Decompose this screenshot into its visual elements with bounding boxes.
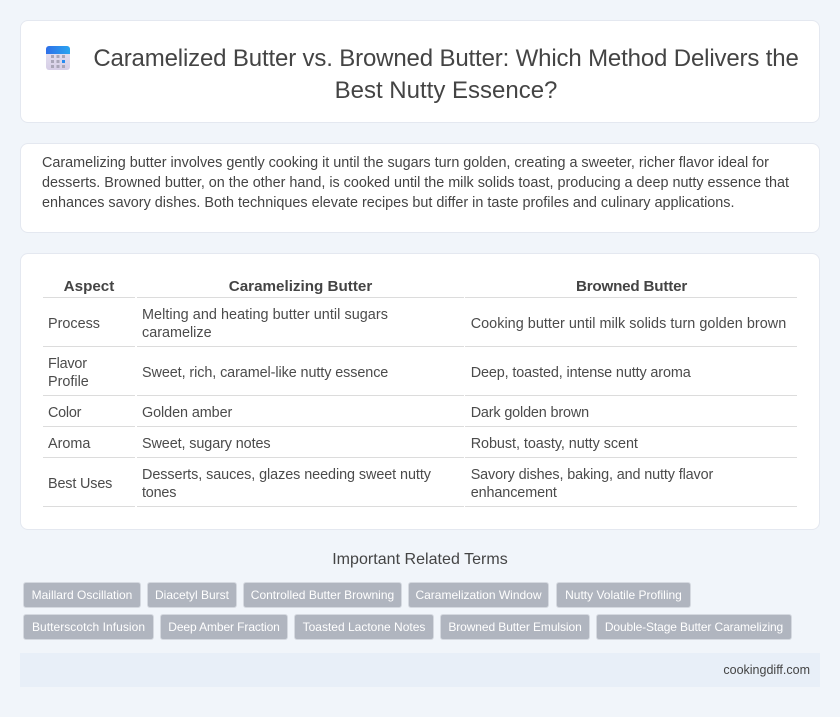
- tag: [556, 582, 691, 608]
- row: color: Golden amber: [142, 405, 232, 421]
- tag: [160, 614, 288, 640]
- tag: Deep Amber Fraction: [168, 620, 280, 634]
- tag: [243, 582, 402, 608]
- tag: [440, 614, 590, 640]
- tag list: [23, 582, 792, 640]
- title: [93, 45, 799, 104]
- tag: [147, 582, 237, 608]
- row: flavor profile: Deep, toasted, intense nutty aroma: [471, 365, 691, 381]
- row: process: Cooking butter until milk solids turn golden brown: [471, 316, 786, 332]
- row: process: [48, 307, 786, 341]
- row: aroma: [48, 436, 638, 452]
- tag: [23, 614, 154, 640]
- tag: Double-Stage Butter Caramelizing: [605, 620, 783, 634]
- row: process: Melting and heating butter until sugars: [142, 307, 388, 323]
- footer bar: [20, 653, 820, 687]
- row: best uses: Best Uses: [48, 476, 112, 492]
- row: flavor profile: [48, 356, 691, 390]
- tag: Controlled Butter Browning: [251, 588, 394, 602]
- heading: related terms: Important Related Terms: [332, 551, 508, 568]
- tag: [23, 582, 141, 608]
- row: flavor profile: Flavor: [48, 356, 87, 372]
- row: best uses: enhancement: [471, 485, 557, 501]
- table heading row: Aspect: [64, 278, 114, 295]
- tag: Maillard Oscillation: [32, 588, 132, 602]
- panel: comparison table: Caramelizing Butter: [229, 278, 372, 295]
- row: best uses: Savory dishes, baking, and nutty flavor: [471, 467, 713, 483]
- tag: Caramelization Window: [415, 588, 542, 602]
- row: color: Color: [48, 405, 81, 421]
- tag: [294, 614, 434, 640]
- row: flavor profile: Profile: [48, 374, 89, 390]
- row: best uses: [48, 467, 714, 501]
- intro text: Caramelizing butter involves gently cooking it until the sugars turn golden, creating a sweeter, richer flavor ideal for: [42, 155, 769, 171]
- tag: Nutty Volatile Profiling: [565, 588, 682, 602]
- panel: comparison table: [20, 253, 820, 530]
- row: aroma: Robust, toasty, nutty scent: [471, 436, 638, 452]
- icon: calendar: [46, 46, 70, 70]
- row: best uses: tones: [142, 485, 176, 501]
- row: color: Dark golden brown: [471, 405, 589, 421]
- row: process: caramelize: [142, 325, 212, 341]
- tag: Butterscotch Infusion: [32, 620, 145, 634]
- row: color: [48, 405, 589, 421]
- tag: Browned Butter Emulsion: [448, 620, 582, 634]
- tag: Diacetyl Burst: [155, 588, 229, 602]
- row: flavor profile: Sweet, rich, caramel-like nutty essence: [142, 365, 388, 381]
- row: best uses: Desserts, sauces, glazes needing sweet nutty: [142, 467, 431, 483]
- panel: comparison table: Browned Butter: [576, 278, 687, 295]
- intro text: enhances savory dishes. Both techniques elevate recipes but differ in taste profiles and culinary applications.: [42, 195, 734, 211]
- panel: introduction: [20, 143, 820, 233]
- tag: [408, 582, 549, 608]
- tag: Toasted Lactone Notes: [303, 620, 425, 634]
- panel: title card: [20, 20, 820, 123]
- row: aroma: Aroma: [48, 436, 90, 452]
- title: Best Nutty Essence?: [335, 77, 557, 104]
- intro text: desserts. Browned butter, on the other hand, is cooked until the milk solids toast, producing a deep nutty essence that: [42, 175, 789, 191]
- intro text: [42, 155, 789, 211]
- title: Caramelized Butter vs. Browned Butter: Which Method Delivers the: [93, 45, 799, 72]
- footer source: cookingdiff.com: [723, 663, 810, 677]
- row: process: Process: [48, 316, 100, 332]
- tag: [596, 614, 792, 640]
- row: aroma: Sweet, sugary notes: [142, 436, 270, 452]
